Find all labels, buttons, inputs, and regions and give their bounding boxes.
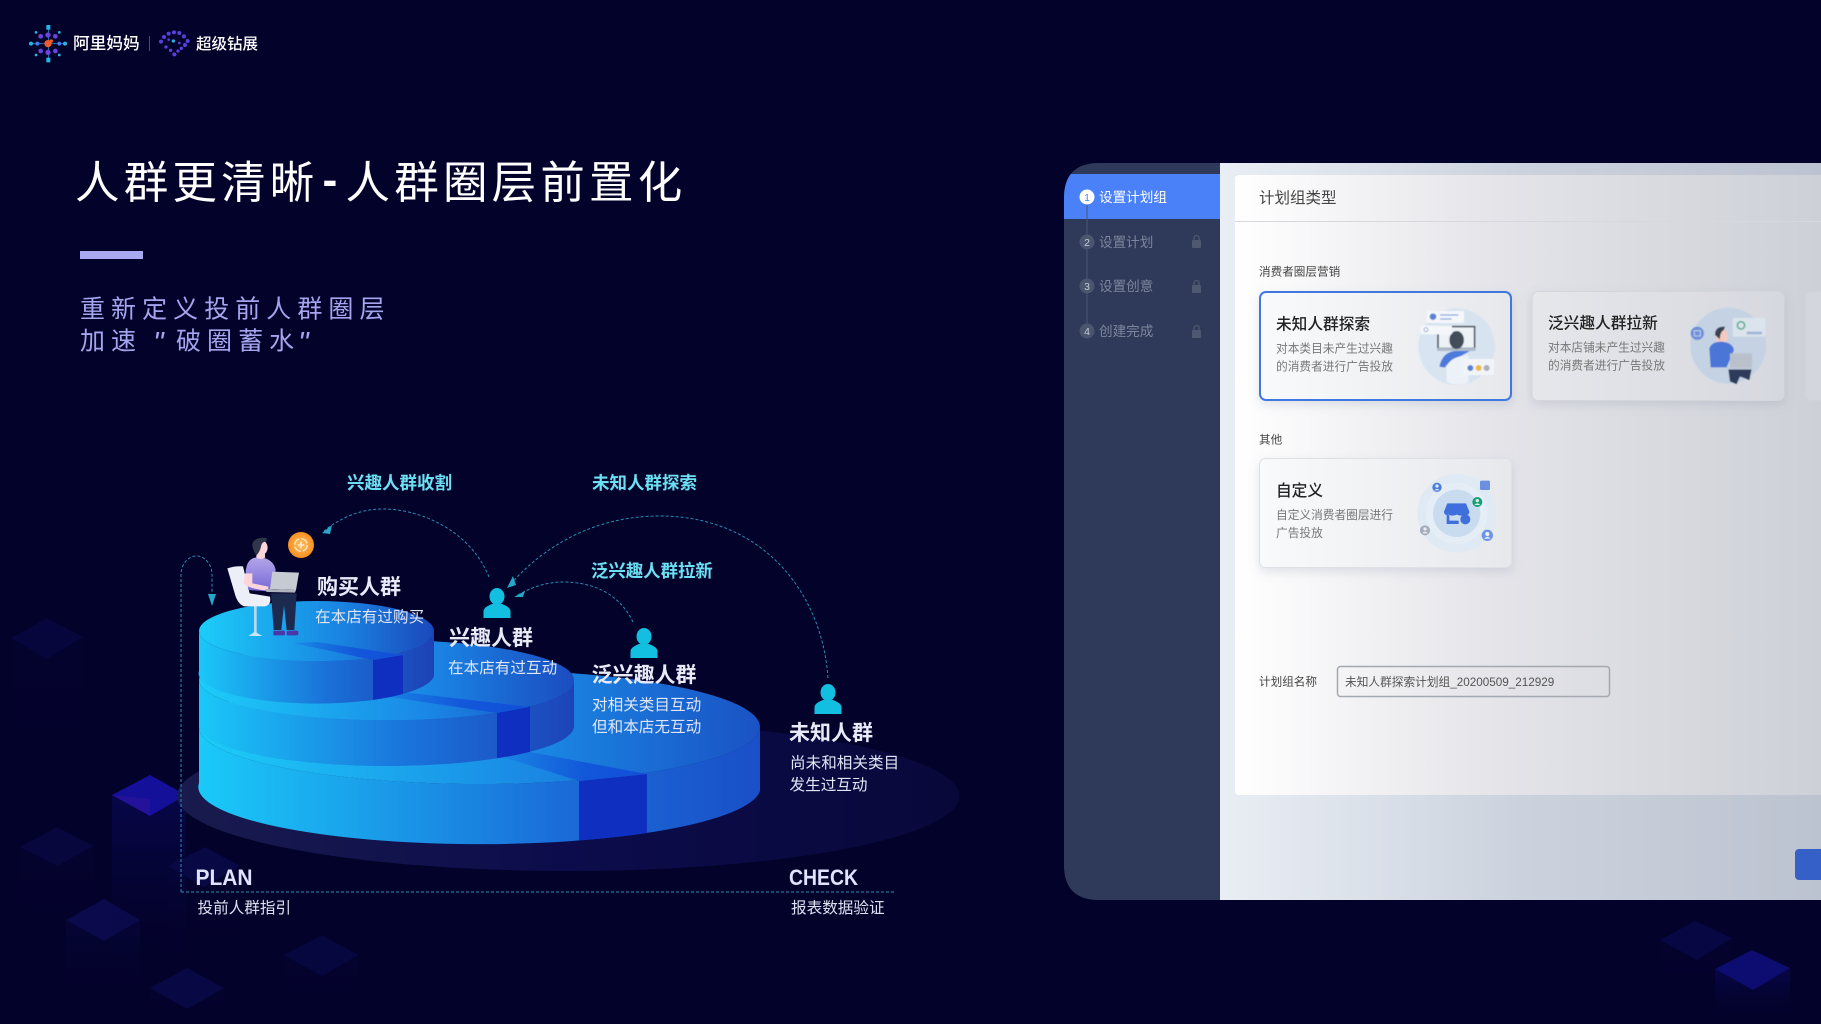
- panel: sidebar: 设置计划: [1099, 235, 1153, 250]
- logo text: 超级钻展: 超级钻展: [196, 35, 258, 53]
- icon: Alimama mark: [29, 25, 67, 62]
- card: 自定义: [1260, 458, 1512, 568]
- subtitle: 破圈蓄水: [176, 328, 300, 356]
- button: [1795, 849, 1821, 880]
- subtitle: ": [298, 326, 315, 360]
- card: 泛兴趣人群拉新: 的消费者进行广告投放: [1548, 358, 1665, 372]
- label: interest audience: 兴趣人群: [449, 627, 533, 650]
- label: PLAN: 投前人群指引: [198, 899, 291, 917]
- logo: Alimama and Super Diamond: [29, 25, 258, 62]
- label: unknown audience: 发生过互动: [790, 776, 867, 794]
- card: 泛兴趣人群拉新: 泛兴趣人群拉新: [1548, 314, 1658, 332]
- label: purchase audience: 购买人群: [317, 576, 401, 599]
- decorative cubes: [11, 618, 1790, 1024]
- label: broad interest audience: 泛兴趣人群: [592, 664, 696, 687]
- card: 未知人群探索: 的消费者进行广告投放: [1276, 360, 1393, 374]
- flow arrows: [181, 509, 896, 892]
- card: partially visible third card: [1805, 292, 1821, 400]
- heading: 计划组类型: 计划组类型: [1259, 189, 1337, 207]
- illustration: store with people: [1417, 474, 1496, 553]
- card: 自定义: 自定义消费者圈层进行: [1276, 508, 1393, 522]
- title: -: [323, 156, 342, 205]
- flow label: 未知人群探索: 未知人群探索: [592, 473, 697, 493]
- card: 泛兴趣人群拉新: [1532, 292, 1784, 400]
- title: 人群圈层前置化: [346, 159, 686, 208]
- label: broad interest audience: 对相关类目互动: [592, 696, 701, 714]
- panel: sidebar: 设置创意: [1099, 278, 1153, 294]
- form: plan group name: 未知人群探索计划组_20200509_212929: [1345, 675, 1554, 689]
- form: plan group name: 计划组名称: [1259, 674, 1317, 688]
- card: 自定义: 广告投放: [1276, 526, 1323, 540]
- flow label: 兴趣人群收割: 兴趣人群收割: [347, 473, 452, 493]
- figure: person on laptop: [227, 532, 314, 636]
- illustration: person at monitor: [1418, 308, 1495, 385]
- card: 自定义: 自定义: [1276, 481, 1323, 500]
- main background: [1220, 163, 1821, 900]
- label: PLAN: PLAN: [196, 865, 252, 890]
- form: plan group name: [1259, 666, 1610, 696]
- stacked audience cylinder chart: [177, 601, 959, 871]
- panel: sidebar: 设置计划组: [1099, 190, 1167, 205]
- subtitle: ": [153, 326, 170, 360]
- content panel: [1235, 175, 1821, 795]
- icon: broad interest person: [630, 628, 658, 658]
- label: PLAN: [196, 865, 291, 917]
- chart base disc: [177, 721, 959, 871]
- subtitle: 重新定义投前人群圈层: [80, 296, 391, 324]
- icon: interest person: [484, 588, 510, 618]
- label: interest audience: [448, 627, 557, 677]
- label: interest audience: 在本店有过互动: [448, 659, 557, 677]
- panel: sidebar: 3: [1084, 281, 1090, 293]
- panel: product screenshot: [1064, 163, 1821, 900]
- panel: sidebar: [1064, 163, 1220, 900]
- subtitle: 加速: [80, 328, 142, 356]
- label: CHECK: 报表数据验证: [791, 899, 885, 917]
- tier: interest and purchase audience: [198, 601, 434, 704]
- panel: sidebar: 1: [1084, 192, 1090, 204]
- illustration: person with laptop: [1690, 308, 1766, 384]
- card: 未知人群探索: [1260, 292, 1511, 400]
- tier: broad interest audience: [198, 641, 574, 766]
- icon: Super Diamond mark: [159, 30, 190, 56]
- flow label: 泛兴趣人群拉新: 泛兴趣人群拉新: [591, 561, 713, 581]
- icon: unknown person: [814, 684, 842, 714]
- label: broad interest audience: [592, 664, 701, 736]
- label: unknown audience: [789, 722, 899, 794]
- icon: orange coin: [288, 532, 314, 558]
- panel: sidebar: 4: [1084, 326, 1090, 338]
- label: unknown audience: 未知人群: [789, 722, 873, 745]
- subtitle: [80, 296, 391, 360]
- section label: 消费者圈层营销: 消费者圈层营销: [1259, 264, 1341, 278]
- panel: sidebar: 2: [1084, 237, 1090, 249]
- label: CHECK: [789, 865, 885, 917]
- label: purchase audience: [315, 576, 424, 626]
- tier: unknown audience: [198, 670, 760, 860]
- section label: 其他: 其他: [1259, 434, 1283, 446]
- label: unknown audience: 尚未和相关类目: [790, 754, 899, 772]
- card: 泛兴趣人群拉新: 对本店铺未产生过兴趣: [1548, 340, 1665, 354]
- label: broad interest audience: 但和本店无互动: [592, 718, 701, 736]
- panel: sidebar: 创建完成: [1099, 324, 1154, 339]
- card: 未知人群探索: 对本类目未产生过兴趣: [1276, 342, 1393, 356]
- label: purchase audience: 在本店有过购买: [315, 608, 424, 626]
- label: CHECK: CHECK: [789, 865, 858, 890]
- card: 未知人群探索: 未知人群探索: [1276, 316, 1370, 334]
- logo text: 阿里妈妈: 阿里妈妈: [73, 34, 140, 53]
- title accent bar: [80, 251, 143, 259]
- title: 人群更清晰: [75, 159, 319, 208]
